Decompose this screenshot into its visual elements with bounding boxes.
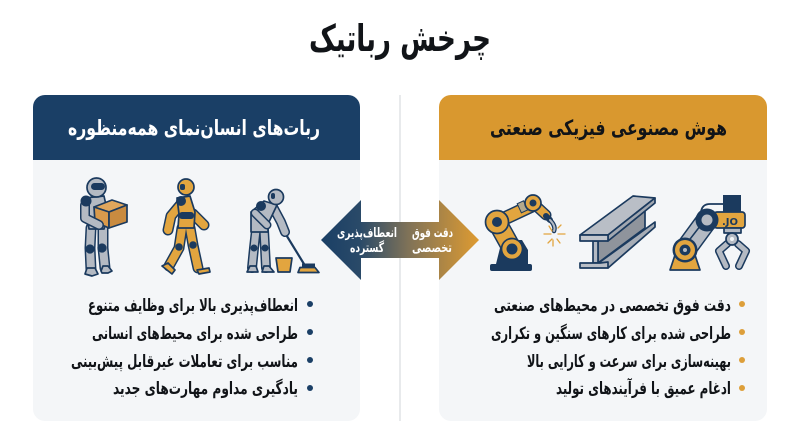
label: ultra precision: دقت فوق	[412, 226, 453, 241]
heading: physical AI	[439, 95, 767, 160]
heading: humanoid robots	[33, 95, 360, 160]
title: چرخش رباتیک	[309, 17, 491, 60]
icon: welding robot arm	[486, 195, 565, 271]
label: broad flexibility: انعطاف‌پذیری	[337, 226, 397, 241]
list: physical AI features: ادغام عمیق با فرآیندهای تولید	[556, 377, 731, 399]
panel: physical AI	[439, 95, 767, 421]
icon: robot mopping	[247, 190, 319, 272]
list: humanoid features: مناسب برای تعاملات غیرقابل پیش‌بینی	[71, 352, 298, 372]
icon: robot carrying box	[80, 178, 127, 276]
list: humanoid features: یادگیری مداوم مهارت‌های جدید	[113, 378, 298, 399]
icon: robot arm with gripper: .JO	[722, 217, 738, 228]
icon: robot arm with gripper	[670, 195, 746, 270]
icon: steel I-beam	[580, 196, 655, 268]
list: humanoid features: طراحی شده برای محیط‌های انسانی	[92, 324, 298, 344]
panel: humanoid robots	[33, 95, 360, 421]
heading: humanoid robots: ربات‌های انسان‌نمای همه‌منظوره	[68, 116, 320, 140]
arrow: flexibility versus precision: گسترده	[350, 240, 384, 256]
arrow: flexibility versus precision	[321, 200, 479, 280]
list: humanoid features: انعطاف‌پذیری بالا برای وظایف متنوع	[88, 296, 298, 316]
arrow: flexibility versus precision: تخصصی	[412, 241, 452, 256]
list: physical AI features	[491, 296, 745, 399]
list: humanoid features	[71, 296, 313, 399]
heading: physical AI: هوش مصنوعی فیزیکی صنعتی	[490, 116, 727, 140]
icon: walking robot	[162, 179, 210, 274]
